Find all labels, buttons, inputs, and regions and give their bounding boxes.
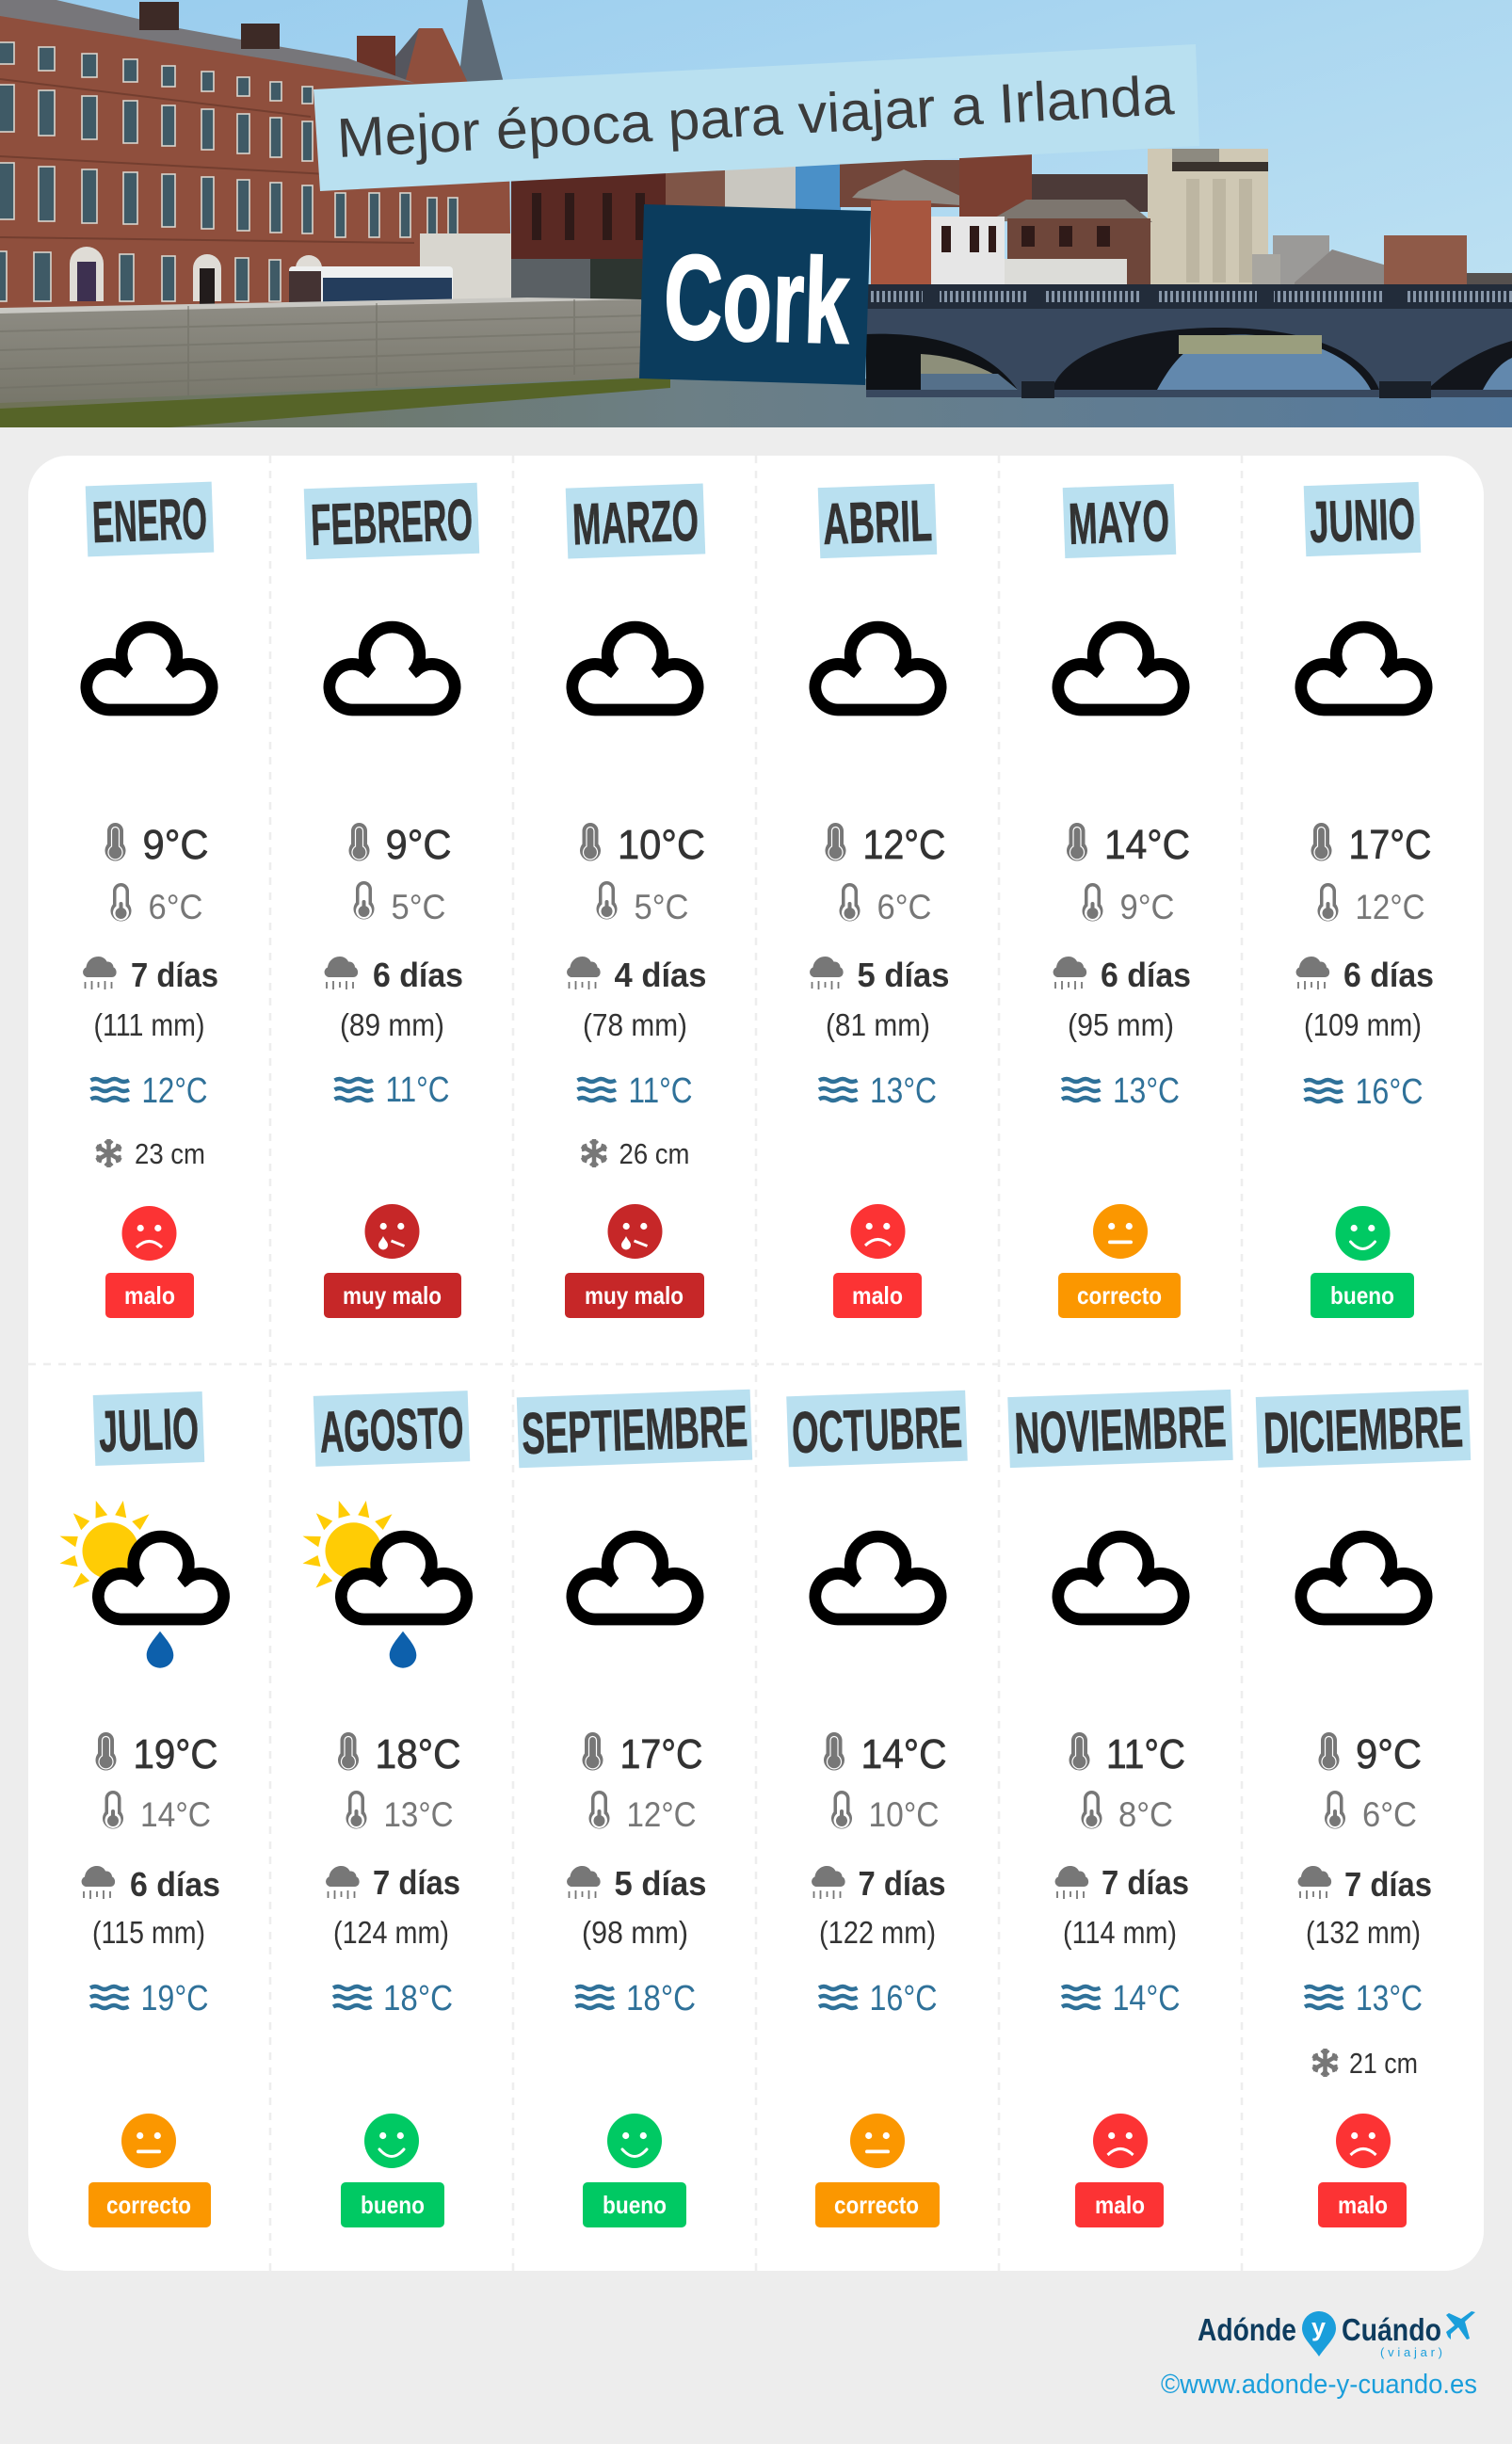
rainy days: 6 días xyxy=(373,956,463,994)
sea temperature: 12°C xyxy=(141,1071,207,1111)
icon: cloud xyxy=(1058,627,1183,710)
bridge xyxy=(866,284,1512,398)
sea temperature: 14°C xyxy=(1113,1979,1181,2018)
rating face: bueno xyxy=(364,2114,419,2168)
high temperature: 14°C xyxy=(861,1731,947,1777)
rainy days xyxy=(83,956,218,994)
rainy days: 7 días xyxy=(1344,1865,1432,1904)
stone embankment wall xyxy=(0,299,670,405)
city name box: Cork: Cork xyxy=(662,230,852,370)
month: enero xyxy=(83,482,218,1318)
rating badge: malo xyxy=(833,1273,922,1318)
rating badge: muy malo xyxy=(565,1273,704,1318)
rating badge: muy malo xyxy=(324,1273,461,1318)
sea temperature: 11°C xyxy=(629,1071,693,1111)
sea temperature xyxy=(1305,1979,1423,2018)
month: noviembre xyxy=(1007,1390,1233,2227)
high temperature: 10°C xyxy=(618,822,705,868)
icon: sun, cloud and rain drop xyxy=(60,1501,224,1668)
sea temperature xyxy=(1062,1071,1180,1111)
high temperature xyxy=(1311,822,1431,868)
rainfall: (115 mm) xyxy=(92,1915,205,1950)
sea temperature: 18°C xyxy=(383,1979,453,2018)
rating face: malo xyxy=(1093,2114,1148,2168)
header photo: Cork riverside xyxy=(0,0,1512,456)
high temperature xyxy=(1318,1731,1422,1777)
rating face: bueno xyxy=(607,2114,662,2168)
rainfall: (114 mm) xyxy=(1063,1915,1177,1950)
rainfall: (81 mm) xyxy=(826,1007,930,1042)
low temperature: 12°C xyxy=(627,1795,697,1834)
low temperature xyxy=(1325,1791,1417,1834)
high temperature: 14°C xyxy=(1104,822,1190,868)
icon: cloud xyxy=(1301,627,1426,710)
calendar panel xyxy=(28,456,1484,2271)
low temperature xyxy=(346,1791,454,1834)
low temperature: 9°C xyxy=(1120,888,1175,926)
month label xyxy=(314,1391,470,1467)
low temperature: 6°C xyxy=(1362,1795,1417,1834)
rating badge: correcto: correcto xyxy=(1077,1281,1162,1310)
sea temperature: 16°C xyxy=(1356,1072,1424,1112)
sea temperature xyxy=(333,1979,453,2018)
high temperature: 19°C xyxy=(134,1731,218,1777)
rainfall: (95 mm) xyxy=(1068,1007,1174,1042)
high temperature xyxy=(824,1731,947,1777)
high temperature xyxy=(1070,1731,1185,1777)
month: septiembre xyxy=(517,1390,752,2227)
month label xyxy=(566,483,705,559)
low temperature xyxy=(1081,1791,1173,1834)
icon: cloud xyxy=(87,627,212,710)
low temperature: 5°C xyxy=(635,888,689,926)
month: julio xyxy=(60,1391,224,2227)
rainy days: 7 días xyxy=(131,956,218,994)
rainy days xyxy=(567,956,706,994)
high temperature: 18°C xyxy=(375,1731,461,1777)
sea temperature xyxy=(90,1979,209,2018)
low temperature: 12°C xyxy=(1356,888,1425,926)
rating badge: malo: malo xyxy=(852,1281,903,1310)
rainfall: (124 mm) xyxy=(333,1915,449,1950)
high temperature: 11°C xyxy=(1106,1731,1185,1777)
high temperature: 17°C xyxy=(1348,822,1431,868)
rating face: muy malo xyxy=(608,1204,663,1259)
rainy days xyxy=(325,956,463,994)
logo: Adónde y Cuándo viajar xyxy=(1198,2311,1475,2359)
rainy days xyxy=(1055,1863,1189,1902)
icon: sun, cloud and rain drop xyxy=(303,1501,467,1668)
rainy days xyxy=(1054,956,1191,994)
rating face: malo xyxy=(1336,2114,1391,2168)
month label: ABRIL xyxy=(822,489,933,557)
rainy days: 5 días xyxy=(614,1864,706,1903)
icon: location pin xyxy=(1302,2311,1336,2356)
rating badge: correcto xyxy=(815,2182,940,2227)
rainy days xyxy=(810,956,949,994)
high temperature xyxy=(1067,822,1190,868)
sea temperature xyxy=(335,1070,450,1110)
icon: cloud xyxy=(572,627,698,710)
month label xyxy=(86,482,214,556)
pavement xyxy=(0,297,641,316)
rating badge: muy malo: muy malo xyxy=(343,1281,442,1310)
rainfall: (111 mm) xyxy=(94,1007,205,1042)
month label: NOVIEMBRE xyxy=(1013,1394,1228,1467)
month label: MAYO xyxy=(1068,489,1170,557)
rainy days xyxy=(1296,956,1434,994)
month label xyxy=(818,484,937,558)
rating badge: muy malo: muy malo xyxy=(585,1281,684,1310)
month label xyxy=(93,1391,204,1466)
low temperature xyxy=(111,883,203,926)
month label: FEBRERO xyxy=(310,488,474,558)
rainfall: (109 mm) xyxy=(1304,1007,1422,1042)
icon: cloud xyxy=(815,627,941,710)
rainy days: 7 días xyxy=(1102,1863,1189,1902)
rating badge: bueno xyxy=(341,2182,444,2227)
sea temperature: 19°C xyxy=(141,1979,209,2018)
sea temperature: 11°C xyxy=(386,1070,450,1110)
sea temperature xyxy=(90,1071,207,1111)
rating face: bueno xyxy=(1335,1206,1390,1261)
low temperature xyxy=(103,1791,211,1834)
month label: JUNIO xyxy=(1309,487,1416,555)
icon: location pin: y xyxy=(1311,2313,1326,2341)
dark upper windows on central block xyxy=(532,193,1110,252)
rainy days: 5 días xyxy=(857,956,949,994)
rating badge: malo xyxy=(1318,2182,1407,2227)
month: febrero xyxy=(304,483,479,1318)
month: diciembre xyxy=(1256,1390,1471,2227)
icon: plane xyxy=(1446,2311,1475,2339)
low temperature: 6°C xyxy=(149,888,203,926)
low temperature xyxy=(1083,883,1175,926)
rainfall: (122 mm) xyxy=(819,1915,936,1950)
rating face: malo xyxy=(122,1206,177,1261)
rating badge: bueno xyxy=(1311,1273,1414,1318)
high temperature xyxy=(825,822,945,868)
low temperature xyxy=(597,881,689,926)
rating badge: malo xyxy=(1075,2182,1164,2227)
rating badge: bueno: bueno xyxy=(1330,1281,1394,1310)
high temperature xyxy=(580,822,705,868)
doors and shops xyxy=(70,247,104,301)
rating badge: malo: malo xyxy=(1095,2191,1145,2219)
rainy days xyxy=(812,1864,945,1903)
month label: AGOSTO xyxy=(318,1395,465,1466)
month label xyxy=(1063,484,1176,558)
high temperature: 17°C xyxy=(619,1731,702,1777)
snow: 21 cm xyxy=(1349,2047,1418,2080)
sea temperature xyxy=(819,1071,937,1111)
month label xyxy=(1007,1390,1233,1468)
month label xyxy=(786,1391,968,1467)
high temperature xyxy=(582,1731,702,1777)
logo: Adónde y Cuándo viajar: Cuándo xyxy=(1342,2312,1441,2347)
bus xyxy=(289,266,453,306)
rainy days: 7 días xyxy=(373,1863,460,1902)
high temperature xyxy=(105,822,209,868)
rating face: malo xyxy=(851,1204,906,1259)
rainy days xyxy=(326,1863,460,1902)
month: marzo xyxy=(565,483,706,1318)
month label: ENERO xyxy=(91,487,208,555)
rainy days: 6 días xyxy=(1343,956,1434,994)
month: octubre xyxy=(786,1391,968,2227)
icon: cloud xyxy=(572,1536,698,1619)
low temperature: 14°C xyxy=(140,1795,211,1834)
rating badge: malo: malo xyxy=(124,1281,175,1310)
month label: MARZO xyxy=(571,489,700,557)
snow: 26 cm xyxy=(619,1137,689,1170)
rating badge: bueno: bueno xyxy=(361,2191,425,2219)
rainfall: (98 mm) xyxy=(582,1915,688,1950)
sea temperature xyxy=(578,1071,693,1111)
sea temperature xyxy=(1305,1072,1424,1112)
month: junio xyxy=(1296,482,1434,1318)
sea temperature xyxy=(819,1979,938,2018)
low temperature: 13°C xyxy=(384,1795,454,1834)
logo: Adónde y Cuándo viajar: (viajar) xyxy=(1380,2345,1442,2359)
rating face: correcto xyxy=(121,2114,176,2168)
high temperature: 9°C xyxy=(1356,1731,1422,1777)
rating badge: bueno: bueno xyxy=(603,2191,667,2219)
low temperature: 5°C xyxy=(392,888,446,926)
month label xyxy=(1304,482,1421,556)
sea temperature: 16°C xyxy=(870,1979,938,2018)
snow xyxy=(96,1137,205,1170)
snow: 23 cm xyxy=(135,1137,205,1170)
icon: cloud xyxy=(330,627,455,710)
sea temperature xyxy=(1062,1979,1181,2018)
rainy days: 6 días xyxy=(1101,956,1191,994)
high temperature xyxy=(338,1731,461,1777)
month label: OCTUBRE xyxy=(791,1395,963,1466)
rating badge: bueno xyxy=(583,2182,686,2227)
sea temperature: 13°C xyxy=(1356,1979,1423,2018)
month label xyxy=(517,1390,752,1468)
sea temperature: 18°C xyxy=(626,1979,696,2018)
rating face: correcto xyxy=(850,2114,905,2168)
high temperature: 9°C xyxy=(143,822,209,868)
low temperature xyxy=(589,1791,697,1834)
rainfall: (78 mm) xyxy=(583,1007,687,1042)
low temperature: 8°C xyxy=(1118,1795,1173,1834)
rating face: muy malo xyxy=(365,1204,420,1259)
windows xyxy=(0,42,458,301)
month label: SEPTIEMBRE xyxy=(521,1394,748,1467)
sea temperature: 13°C xyxy=(1113,1071,1180,1111)
rainfall: (132 mm) xyxy=(1306,1915,1421,1950)
rating badge: correcto: correcto xyxy=(106,2191,191,2219)
title banner xyxy=(314,44,1199,191)
low temperature: 10°C xyxy=(868,1795,940,1834)
rainy days xyxy=(1298,1865,1432,1904)
river water xyxy=(0,377,1512,427)
rainy days xyxy=(82,1865,220,1904)
low temperature xyxy=(1318,883,1425,926)
title banner: Mejor época para viajar a Irlanda xyxy=(335,64,1176,169)
rating badge: correcto: correcto xyxy=(834,2191,919,2219)
rating badge: malo xyxy=(105,1273,194,1318)
sea temperature xyxy=(576,1979,696,2018)
snow xyxy=(1312,2047,1418,2080)
rating face: correcto xyxy=(1093,1204,1148,1259)
month: abril xyxy=(810,484,949,1318)
rating badge: correcto xyxy=(1058,1273,1181,1318)
low temperature xyxy=(840,883,932,926)
rainfall: (89 mm) xyxy=(340,1007,444,1042)
logo: Adónde y Cuándo viajar: Adónde xyxy=(1198,2312,1296,2347)
high temperature xyxy=(96,1731,218,1777)
icon: cloud xyxy=(815,1536,941,1619)
snow xyxy=(582,1137,689,1170)
icon: cloud xyxy=(1301,1536,1426,1619)
sea temperature: 13°C xyxy=(870,1071,937,1111)
high temperature: 12°C xyxy=(862,822,945,868)
rating badge: correcto xyxy=(88,2182,211,2227)
low temperature xyxy=(354,881,446,926)
low temperature xyxy=(831,1791,940,1834)
city name box: Cork xyxy=(639,204,871,385)
low temperature: 6°C xyxy=(877,888,932,926)
month label: JULIO xyxy=(98,1396,200,1465)
rainy days: 7 días xyxy=(859,1864,945,1903)
rating badge: malo: malo xyxy=(1338,2191,1388,2219)
month: agosto xyxy=(303,1391,470,2227)
rainy days: 4 días xyxy=(614,956,706,994)
rainy days xyxy=(567,1864,706,1903)
high temperature: 9°C xyxy=(386,822,452,868)
icon: cloud xyxy=(1058,1536,1183,1619)
month: mayo xyxy=(1054,484,1191,1318)
month label xyxy=(304,483,479,559)
rainy days: 6 días xyxy=(130,1865,220,1904)
high temperature xyxy=(348,822,452,868)
website url: ©www.adonde-y-cuando.es xyxy=(1161,2370,1477,2400)
